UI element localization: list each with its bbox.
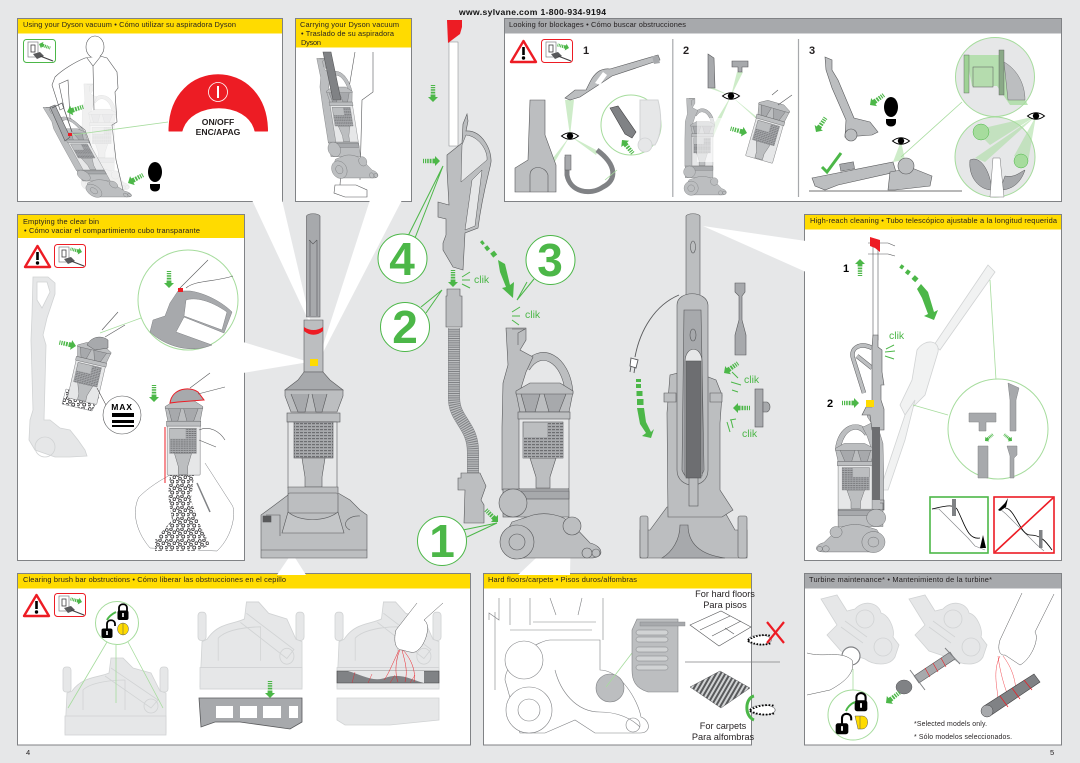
- arrow: [58, 338, 77, 351]
- heading: High-reach cleaning • Tubo telescópico ajustable a la longitud requerida: [810, 216, 1058, 225]
- stairs: correct: [930, 497, 988, 553]
- heading: Dyson: [301, 38, 321, 47]
- filter: [294, 422, 333, 458]
- heading: • Traslado de su aspiradora: [301, 29, 395, 38]
- callout wedge: floors panel: [518, 525, 571, 575]
- heading: • Cómo vaciar el compartimiento cubo transparante: [24, 226, 200, 235]
- step 3 marker: 3: [537, 234, 563, 286]
- clik: clik: [889, 330, 905, 342]
- hand and threads: [996, 593, 1054, 700]
- clik body: [512, 307, 541, 325]
- clik body: clik: [525, 309, 541, 321]
- heading: Hard floors/carpets • Pisos duros/alfombras: [488, 575, 637, 584]
- panel: looking for blockages: [504, 18, 1062, 202]
- callout wedge: bin panel: [243, 342, 309, 373]
- pointer lines: [68, 642, 163, 708]
- labels: Para pisos: [703, 600, 747, 610]
- base: [640, 507, 747, 558]
- red band: [304, 327, 323, 335]
- step numbers: 1: [583, 45, 589, 57]
- on/off label: ON/OFF: [202, 117, 234, 127]
- clik right 2: [727, 419, 758, 440]
- faded upright vacuum: [81, 84, 129, 190]
- clik right 1: clik: [744, 374, 760, 386]
- footnotes: [914, 721, 1012, 741]
- panel: hard floors / carpets: [484, 574, 784, 745]
- arrow right: [842, 398, 859, 408]
- step 2 illustration: [684, 54, 792, 195]
- curved arrow: [899, 264, 938, 320]
- clik hose: clik: [474, 274, 490, 286]
- icon: plug in: [24, 40, 56, 62]
- hard floor tile: [690, 611, 751, 646]
- attachments circle: [948, 379, 1048, 479]
- icon: warning: [25, 246, 50, 267]
- accessory: crevice tool: [735, 283, 746, 355]
- panel: emptying the clear bin: [18, 214, 244, 560]
- arrow up: [855, 259, 865, 276]
- label 2: 2: [827, 398, 833, 410]
- arrow down: [265, 681, 275, 698]
- footnotes: *Selected models only.: [914, 721, 987, 728]
- faded raised hose and wand: [880, 265, 995, 490]
- bin being emptied: [135, 373, 234, 551]
- detail circle: [138, 250, 238, 350]
- cyclones: [285, 390, 343, 412]
- power cord: [630, 295, 679, 373]
- faded cover: [337, 698, 439, 725]
- handle stem and top of cyclone: [285, 372, 343, 390]
- icon: unplug: [54, 594, 86, 616]
- on/off label: ENC/APAG: [196, 127, 241, 137]
- brush bar: [337, 671, 439, 683]
- upper handle: [438, 20, 491, 270]
- faded brush base 2: [198, 602, 304, 689]
- lower tube: [304, 320, 323, 372]
- heading: Using your Dyson vacuum • Cómo utilizar su aspiradora Dyson: [23, 20, 236, 29]
- wand: [323, 52, 341, 100]
- body: [667, 370, 733, 517]
- curved arrow: handle: [480, 240, 514, 298]
- callout wedge: high-reach panel: [703, 226, 806, 272]
- callout wedge: carrying panel: [317, 200, 402, 364]
- heading: [23, 217, 200, 235]
- step 2 marker: 2: [392, 301, 418, 353]
- carried vacuum: [314, 58, 378, 179]
- page number 5: 5: [1050, 748, 1054, 757]
- wand: [306, 214, 320, 317]
- divider: [685, 661, 780, 663]
- removed cover: [199, 698, 302, 729]
- icon: brush rotating: [747, 696, 775, 720]
- website and phone: www.sylvane.com 1-800-934-9194: [458, 7, 606, 17]
- step 2 marker: [380, 290, 442, 353]
- faded brush base 1: [63, 658, 168, 735]
- arrow: [721, 359, 741, 377]
- arrow: [883, 689, 902, 707]
- on/off label: [196, 117, 241, 137]
- button: [596, 674, 624, 702]
- clik right 2: clik: [742, 428, 758, 440]
- hose loop: [677, 294, 708, 485]
- pointer line: [100, 318, 141, 333]
- base: [261, 487, 367, 558]
- labels: For hard floors: [695, 589, 755, 599]
- brush bar 3: [981, 674, 1040, 717]
- upright vacuum: [816, 237, 895, 553]
- bin with debris: [62, 312, 125, 411]
- step 4 marker: [378, 166, 443, 285]
- panel: clearing brush bar obstructions: [18, 574, 470, 745]
- callout wedge: brush panel: [277, 553, 306, 575]
- panel: high-reach cleaning: [804, 214, 1062, 560]
- page number 4: 4: [26, 748, 30, 757]
- step numbers: 3: [809, 45, 815, 57]
- hose assembly: [446, 289, 486, 523]
- heading: [300, 20, 399, 47]
- clik: [885, 330, 905, 359]
- labels: Para alfombras: [692, 732, 755, 742]
- step 4 marker: 4: [389, 233, 415, 285]
- person legs: [334, 52, 373, 197]
- heading: Looking for blockages • Cómo buscar obstrucciones: [509, 20, 686, 29]
- icon: MAX level: MAX: [111, 402, 133, 412]
- cone: [302, 458, 325, 487]
- labels: [692, 589, 755, 742]
- pointer line: [606, 653, 632, 687]
- curved arrow: cord: [636, 379, 654, 438]
- icon: MAX level: [103, 396, 141, 434]
- hand: [395, 603, 443, 652]
- rear vacuum: [640, 214, 747, 558]
- person outline: [52, 36, 123, 190]
- icon: unplug: [54, 244, 86, 268]
- step 1 illustration: [515, 55, 661, 192]
- heading: Carrying your Dyson vacuum: [300, 20, 399, 29]
- arrow: [65, 102, 85, 117]
- step numbers: 2: [683, 45, 689, 57]
- arrow: [149, 385, 159, 402]
- label 1: 1: [843, 263, 849, 275]
- lock detail circle: [96, 602, 138, 644]
- turbine head 2: [909, 595, 987, 664]
- dividers: [673, 39, 798, 197]
- arrow: [126, 171, 145, 187]
- yellow button: [310, 359, 318, 366]
- panel: turbine maintenance: [804, 574, 1062, 745]
- icon: warning: [24, 595, 49, 616]
- icon: crossed brush: [748, 622, 784, 645]
- callout wedge: using panel: [252, 200, 312, 328]
- nozzle detail: [632, 619, 685, 692]
- pointer lines: [913, 280, 996, 415]
- step 1 marker: [418, 515, 497, 567]
- icon: warning: [511, 41, 536, 62]
- icon: on/off dial: [169, 75, 268, 131]
- red threads: [384, 650, 415, 682]
- clik hose: [462, 272, 490, 288]
- accessory: stair tool: [755, 389, 770, 427]
- tilted vacuum: [40, 103, 133, 197]
- wand: [686, 214, 700, 297]
- pointer line: [852, 669, 854, 690]
- front vacuum: [261, 214, 367, 558]
- step 3 illustration: [809, 38, 1044, 197]
- removed disc: [896, 680, 912, 694]
- pointer line: [72, 122, 168, 135]
- panel: carrying your Dyson vacuum: [296, 18, 412, 202]
- footnotes: * Sólo modelos seleccionados.: [914, 734, 1012, 741]
- vacuum outline: [489, 598, 648, 733]
- clik right 1: [731, 372, 760, 392]
- heading: Clearing brush bar obstructions • Cómo liberar las obstrucciones en el cepillo: [23, 575, 286, 584]
- stairs: incorrect: [994, 497, 1054, 553]
- heading: Emptying the clear bin: [23, 217, 99, 226]
- carpet tile: [690, 671, 750, 708]
- icon: unplug: [542, 40, 572, 62]
- labels: For carpets: [700, 721, 747, 731]
- faded vacuum: [29, 277, 87, 457]
- brush bar 2: [910, 648, 960, 690]
- panel: using your Dyson vacuum: [18, 18, 282, 202]
- side vacuum: [499, 328, 601, 559]
- turbine head 1: [807, 595, 899, 695]
- heading: Turbine maintenance* • Mantenimiento de la turbine*: [809, 575, 992, 584]
- step 3 marker: [517, 234, 575, 300]
- step 1 marker: 1: [429, 515, 455, 567]
- clear bin: [288, 422, 337, 488]
- arrow: [733, 403, 750, 413]
- step numbers: [583, 45, 815, 57]
- lock detail circle: [828, 690, 878, 740]
- arrows on handle: [423, 85, 502, 526]
- faded brush base 3: [335, 602, 441, 689]
- dark hose: [686, 361, 701, 478]
- arrow down: [448, 270, 458, 287]
- icon: foot: [148, 162, 162, 192]
